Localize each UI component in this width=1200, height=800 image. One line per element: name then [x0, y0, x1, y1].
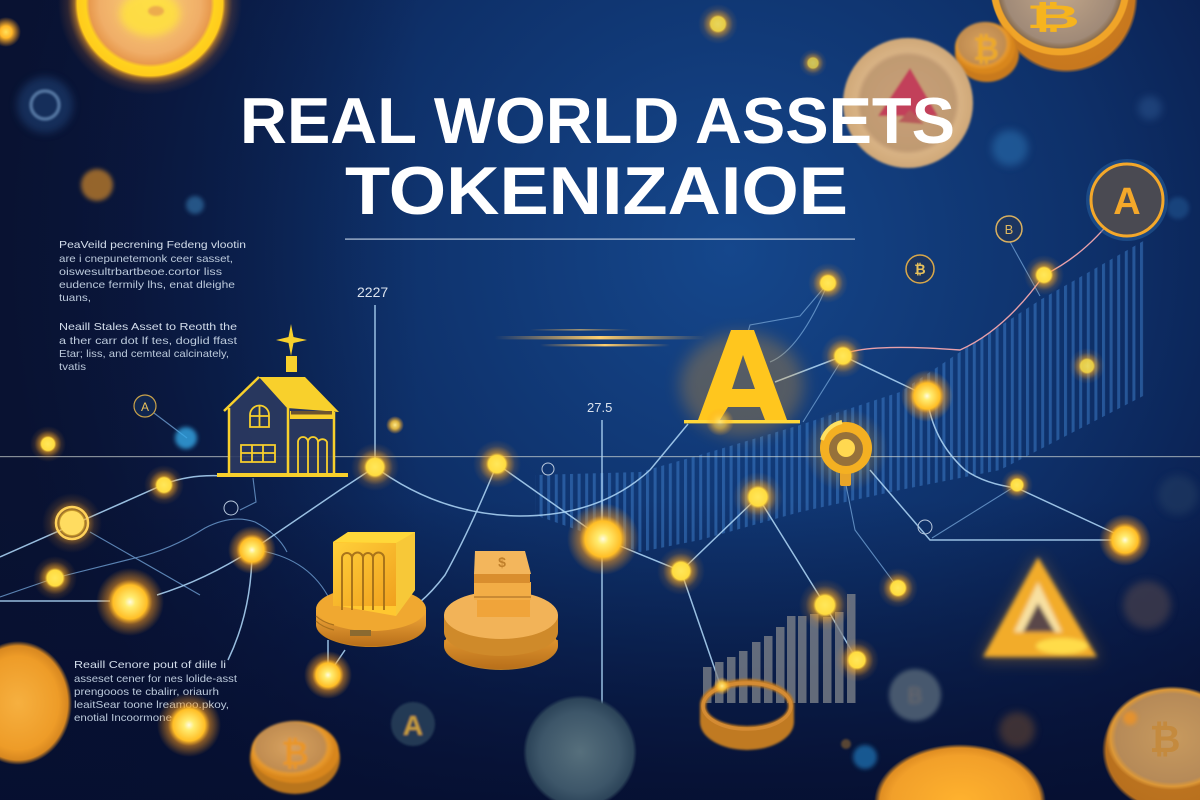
coin: bottom gold blurred [870, 740, 1050, 800]
icon: small coin badge: B [1005, 222, 1013, 237]
coin: bottom centre blue orb [520, 692, 640, 800]
icon: large letter A [680, 330, 804, 437]
icon: small letter badge: A [141, 400, 149, 414]
icon: gold triangle [980, 555, 1100, 660]
icon: small coin badge [906, 255, 934, 283]
coin: top right large: ₿ [1026, 0, 1080, 35]
icon: stacked coins and bars [444, 551, 558, 670]
text block: middle [59, 321, 237, 373]
coin: lower right slate orb [889, 669, 941, 721]
network nodes [30, 255, 1151, 757]
coin: lower right slate orb: B [908, 683, 922, 708]
coin: bottom right [1100, 684, 1200, 800]
text block: middle: tvatis [59, 361, 86, 373]
text block: top: eudence fermily lhs, enat dleighe [59, 279, 235, 291]
text block: bottom: enotial Incoormone [74, 712, 172, 724]
text block: bottom: leaitSear toone lreamoo.pkoy, [74, 699, 229, 711]
icon: blurred letter A coin [391, 702, 435, 746]
icon: small outline badges [224, 463, 932, 534]
text block: top: oiswesultrbartbeoe.cortor liss [59, 266, 222, 278]
text block: bottom: asseset cener for nes lolide-asst [74, 673, 237, 685]
title: TOKENIZAIOE [345, 153, 848, 229]
icon: small letter badge [134, 395, 156, 417]
text block: bottom [74, 659, 237, 724]
icon: blurred letter A coin: A [403, 710, 423, 741]
title [240, 84, 955, 229]
title rule [345, 238, 855, 240]
text block: bottom: Reaill Cenore pout of diile li [74, 659, 226, 671]
icon: house [217, 324, 348, 477]
icon: small coin badge [996, 216, 1022, 242]
text block: middle: a ther carr dot lf tes, doglid ffast [59, 335, 237, 347]
title: REAL WORLD ASSETS [240, 84, 955, 157]
decorative blurred orbs [0, 4, 1162, 384]
icon: glowing gold bulb coin [804, 408, 888, 492]
coin: top left glowing ring [55, 0, 245, 96]
icon: bitcoin ring top right: A [1113, 181, 1141, 223]
text block: top: are i cnepunetemonk ceer sasset, [59, 253, 233, 265]
bar chart: bottom [703, 594, 856, 703]
label: 2227: 2227 [357, 284, 388, 300]
coin: bottom bitcoin [250, 721, 340, 794]
label: 27.5: 27.5 [587, 400, 612, 415]
text block: top [59, 239, 246, 304]
coin: bottom left blurred [0, 640, 74, 768]
icon: stacked coins and bars: $ [498, 554, 506, 570]
icon: bitcoin ring top right [1086, 159, 1168, 241]
icon: small coin badge: ₿ [914, 261, 926, 277]
blue bar chart wave [535, 240, 1145, 552]
icon: gold ring [700, 677, 794, 750]
coin: tan with red triangle [843, 38, 973, 168]
text block: middle: Neaill Stales Asset to Reotth the [59, 321, 237, 333]
icon: gold disc with arches block [316, 532, 426, 647]
horizontal axis line [0, 456, 1200, 457]
text block: bottom: prengooos te cbalirr, oriaurh [74, 686, 219, 698]
coin: top right large [988, 0, 1140, 74]
coin: bottom bitcoin: ₿ [281, 735, 309, 773]
coin: top right small: ₿ [973, 31, 999, 67]
coin: top right small [955, 22, 1019, 82]
coin: bottom right: ₿ [1150, 719, 1180, 761]
text block: middle: Etar; liss, and cemteal calcinately, [59, 348, 229, 360]
network lines [0, 214, 1125, 725]
text block: top: tuans, [59, 292, 91, 304]
text block: top: PeaVeild pecrening Fedeng vlootin [59, 239, 246, 251]
horizontal light flare [495, 329, 705, 346]
